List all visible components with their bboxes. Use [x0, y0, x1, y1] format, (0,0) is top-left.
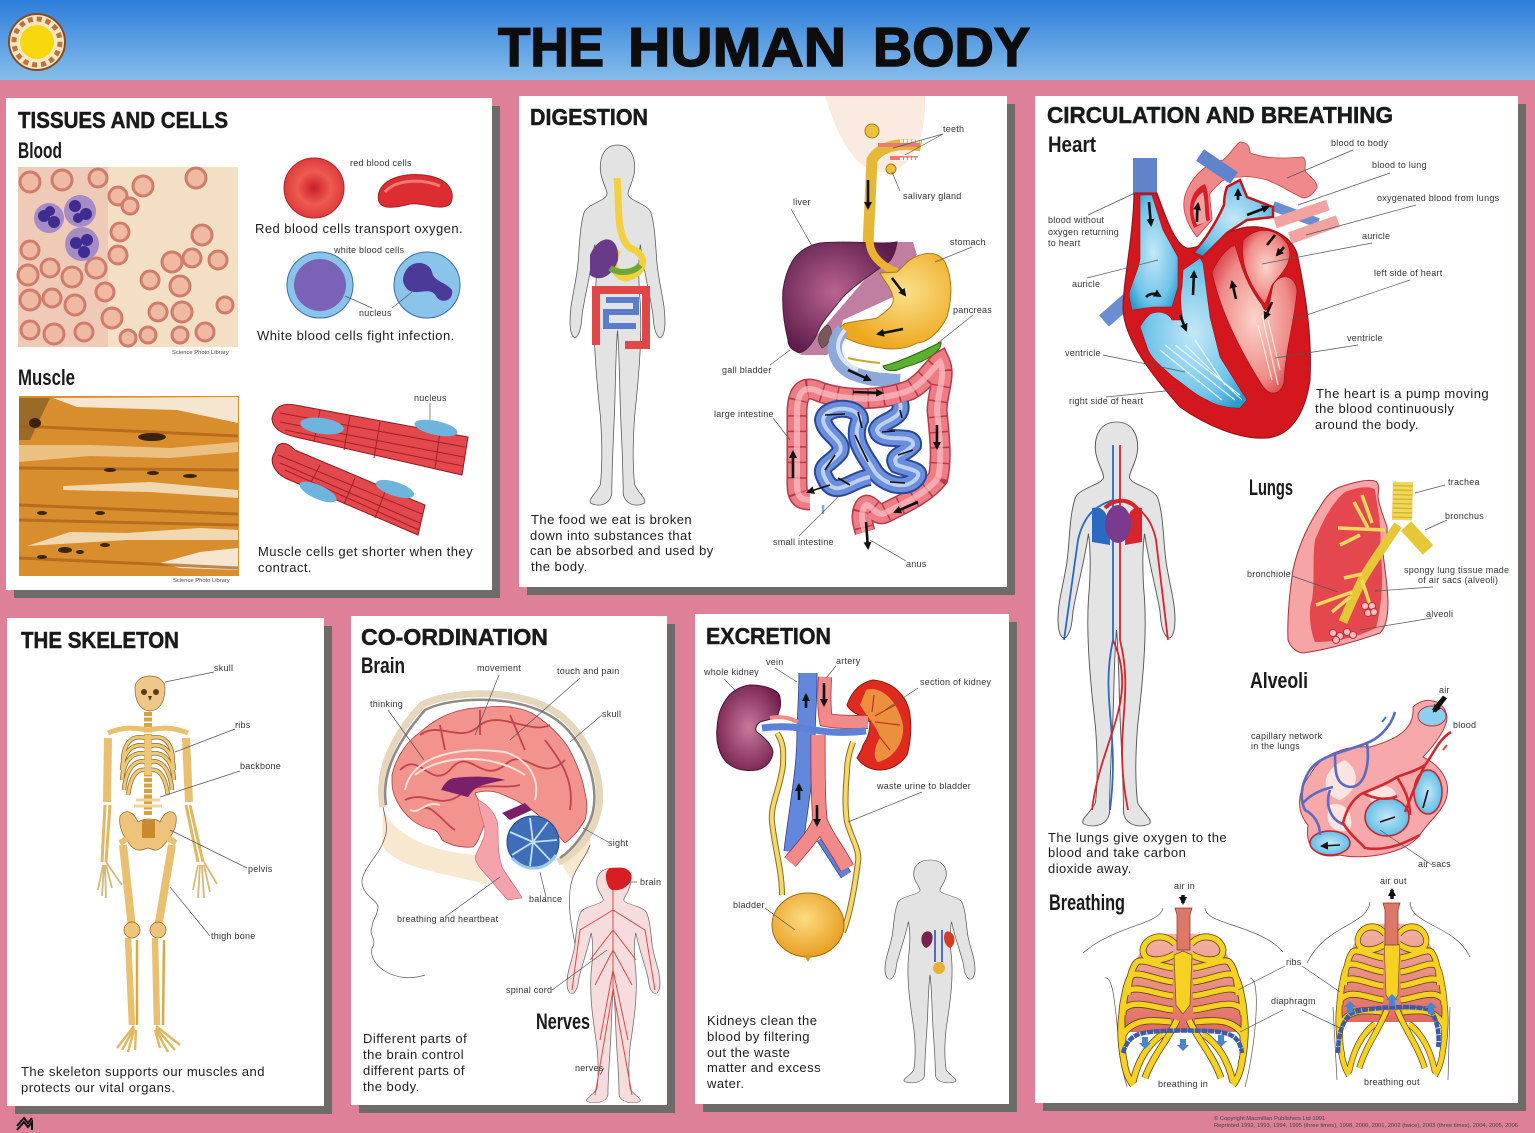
- heart labels: oxygen returning: [1048, 227, 1119, 237]
- brain labels: movement: [477, 663, 521, 673]
- caption: excretion: [706, 1013, 821, 1091]
- icon: red blood cells: [284, 158, 452, 218]
- caption: excretion: out the waste: [707, 1045, 790, 1060]
- copyright: © Copyright Macmillan Publishers Ltd 1991: [1214, 1115, 1325, 1122]
- illustration: lungs: [1288, 480, 1428, 653]
- nerves labels: brain: [640, 877, 661, 887]
- caption: excretion: blood by filtering: [707, 1029, 810, 1044]
- skeleton labels: thigh bone: [211, 931, 256, 941]
- digestion labels: stomach: [950, 237, 986, 247]
- caption: skeleton: The skeleton supports our muscles and: [21, 1064, 265, 1079]
- digestion labels: liver: [793, 197, 811, 207]
- caption: circulation: The lungs give oxygen to the: [1048, 830, 1227, 845]
- caption: digestion: the body.: [531, 559, 588, 574]
- subheading: nerves: Nerves: [536, 1009, 590, 1034]
- heart labels: blood without: [1048, 215, 1105, 225]
- figure: body with kidneys: [885, 860, 975, 1083]
- caption: circulation: blood and take carbon: [1048, 845, 1186, 860]
- photo: blood smear: [18, 167, 238, 347]
- figure: body with circulation: [1058, 422, 1175, 826]
- illustration: large intestine: [793, 362, 942, 548]
- illustration: skeleton: [98, 676, 217, 1052]
- lungs labels: [1247, 477, 1509, 630]
- title: THE: [498, 16, 604, 78]
- lungs labels: of air sacs (alveoli): [1418, 575, 1498, 585]
- caption: heart: The heart is a pump moving: [1316, 386, 1489, 401]
- caption: excretion: Kidneys clean the: [707, 1013, 817, 1028]
- breathing labels: air in: [1174, 881, 1195, 891]
- subheading: breathing: Breathing: [1049, 890, 1125, 915]
- excretion labels: [703, 656, 992, 930]
- figure: nervous system: [567, 868, 660, 1103]
- breathing labels: breathing in: [1158, 1079, 1208, 1089]
- illustration: breathing in: [1083, 895, 1283, 1087]
- heart labels: [1048, 138, 1500, 406]
- excretion labels: vein: [766, 657, 784, 667]
- caption: heart: around the body.: [1315, 417, 1419, 432]
- lungs labels: trachea: [1448, 477, 1480, 487]
- heart labels: auricle: [1072, 279, 1100, 289]
- excretion labels: bladder: [733, 900, 765, 910]
- heading: co-ordination: CO-ORDINATION: [361, 624, 548, 650]
- caption: brain: Different parts of: [363, 1031, 467, 1046]
- caption: heart: the blood continuously: [1315, 401, 1455, 416]
- lungs labels: bronchus: [1445, 511, 1484, 521]
- title: BODY: [873, 16, 1030, 78]
- header banner: [0, 0, 1535, 80]
- lungs labels: spongy lung tissue made: [1404, 565, 1509, 575]
- skeleton labels: backbone: [240, 761, 281, 771]
- caption: skeleton: protects our vital organs.: [21, 1080, 175, 1095]
- brain labels: breathing and heartbeat: [397, 914, 499, 924]
- caption: muscle cells: Muscle cells get shorter when they: [258, 544, 473, 559]
- illustration: small intestine: [808, 403, 918, 492]
- caption: brain: different parts of: [363, 1063, 465, 1078]
- illustration: brain: [362, 694, 600, 978]
- heart labels: oxygenated blood from lungs: [1377, 193, 1500, 203]
- lungs labels: bronchiole: [1247, 569, 1291, 579]
- heading: tissues and cells: TISSUES AND CELLS: [18, 107, 228, 133]
- alveoli labels: in the lungs: [1251, 741, 1300, 751]
- alveoli labels: blood: [1453, 720, 1476, 730]
- heading: excretion: EXCRETION: [706, 623, 831, 649]
- illustration: heart: [1104, 142, 1338, 438]
- photo credit: Science Photo Library: [173, 578, 230, 584]
- title: HUMAN: [628, 16, 846, 78]
- heading: circulation and breathing: CIRCULATION AND BREATHING: [1047, 102, 1393, 128]
- heart labels: ventricle: [1347, 333, 1383, 343]
- caption: muscle cells second line: contract.: [258, 560, 312, 575]
- panel: digestion: [519, 96, 1015, 595]
- caption: red blood cells: Red blood cells transport oxygen.: [255, 221, 463, 236]
- caption: white blood cells: White blood cells fight infection.: [257, 328, 455, 343]
- label: nucleus: nucleus: [359, 308, 392, 318]
- label: red blood cells: red blood cells: [350, 158, 412, 168]
- caption: digestion: The food we eat is broken: [531, 512, 692, 527]
- subheading: alveoli: Alveoli: [1250, 668, 1308, 693]
- photo credit: Science Photo Library: [172, 350, 229, 356]
- photo: muscle tissue: [19, 396, 239, 576]
- caption: circulation: dioxide away.: [1048, 861, 1132, 876]
- subheading: lungs: Lungs: [1249, 475, 1293, 500]
- brain labels: [370, 663, 629, 924]
- heart labels: to heart: [1048, 238, 1081, 248]
- brain labels: sight: [608, 838, 629, 848]
- skeleton labels: [160, 663, 281, 941]
- heart labels: auricle: [1362, 231, 1390, 241]
- heart labels: right side of heart: [1069, 396, 1144, 406]
- heart labels: left side of heart: [1374, 268, 1443, 278]
- illustration: mouth and oesophagus: [825, 96, 925, 245]
- nerves labels: nerves: [575, 1063, 604, 1073]
- heart labels: ventricle: [1065, 348, 1101, 358]
- subheading: heart: Heart: [1048, 132, 1097, 157]
- excretion labels: waste urine to bladder: [876, 781, 971, 791]
- alveoli labels: air: [1439, 685, 1450, 695]
- title: [498, 16, 1030, 78]
- alveoli labels: capillary network: [1251, 731, 1323, 741]
- heart labels: blood to body: [1331, 138, 1389, 148]
- panel: circulation and breathing: [1035, 96, 1526, 1111]
- heading: digestion: DIGESTION: [530, 104, 648, 130]
- nerves labels: spinal cord: [506, 985, 552, 995]
- caption: excretion: matter and excess: [707, 1060, 821, 1075]
- panel: excretion: [695, 614, 1017, 1112]
- illustration: urinary system: [717, 673, 911, 962]
- caption: circulation: [1048, 830, 1227, 876]
- illustration: alveoli: [1300, 697, 1451, 857]
- caption: brain: the body.: [363, 1079, 420, 1094]
- caption: skeleton: [21, 1064, 265, 1095]
- icon: sun logo: [9, 14, 65, 70]
- subheading: brain: Brain: [361, 653, 405, 678]
- digestion labels: gall bladder: [722, 365, 772, 375]
- brain labels: thinking: [370, 699, 403, 709]
- digestion labels: anus: [906, 559, 927, 569]
- breathing labels: air out: [1380, 876, 1407, 886]
- illustration: breathing out: [1307, 890, 1470, 1080]
- figure: body with digestive system: [570, 145, 665, 505]
- icon: muscle cells: [272, 403, 468, 535]
- alveoli labels: air sacs: [1418, 859, 1451, 869]
- subheading: muscle: Muscle: [18, 365, 75, 390]
- publisher logo: [17, 1118, 32, 1130]
- nerves labels: [506, 877, 661, 1075]
- digestion labels: pancreas: [953, 305, 992, 315]
- panel: tissues and cells: [6, 98, 500, 598]
- skeleton labels: skull: [214, 663, 233, 673]
- digestion labels: small intestine: [773, 537, 834, 547]
- illustration: liver and stomach: [783, 230, 951, 381]
- excretion labels: whole kidney: [703, 667, 759, 677]
- caption: brain: the brain control: [363, 1047, 464, 1062]
- icon: white blood cells: [287, 252, 460, 318]
- lungs labels: alveoli: [1426, 609, 1453, 619]
- skeleton labels: pelvis: [248, 864, 273, 874]
- panel: co-ordination: [351, 616, 675, 1113]
- digestion labels: teeth: [943, 124, 964, 134]
- digestion labels: large intestine: [714, 409, 774, 419]
- subheading: blood: Blood: [18, 138, 62, 163]
- digestion labels: salivary gland: [903, 191, 962, 201]
- caption: digestion: can be absorbed and used by: [530, 543, 714, 558]
- caption: digestion: down into substances that: [530, 528, 692, 543]
- panel: the skeleton: [7, 618, 332, 1114]
- copyright: Reprinted 1992, 1993, 1994, 1995 (three times), 1998, 2000, 2001, 2002 (twice), 2003 (three times), 2004, 2005, 2006: [1214, 1123, 1518, 1129]
- caption: excretion: water.: [706, 1076, 744, 1091]
- breathing labels: ribs: [1286, 957, 1302, 967]
- brain labels: skull: [602, 709, 621, 719]
- brain labels: balance: [529, 894, 562, 904]
- heading: the skeleton: THE SKELETON: [21, 627, 179, 653]
- label: white blood cells: white blood cells: [333, 245, 405, 255]
- label: nucleus: nucleus: [414, 393, 447, 403]
- skeleton labels: ribs: [235, 720, 251, 730]
- alveoli labels: [1251, 685, 1476, 869]
- excretion labels: artery: [836, 656, 861, 666]
- brain labels: touch and pain: [557, 666, 620, 676]
- breathing labels: [1158, 876, 1420, 1089]
- breathing labels: breathing out: [1364, 1077, 1420, 1087]
- caption: digestion: [530, 512, 714, 574]
- excretion labels: section of kidney: [920, 677, 992, 687]
- copyright: [1214, 1115, 1518, 1129]
- breathing labels: diaphragm: [1271, 996, 1316, 1006]
- digestion labels: [714, 124, 992, 569]
- caption: heart: [1315, 386, 1489, 432]
- caption: brain: [363, 1031, 467, 1094]
- heart labels: blood to lung: [1372, 160, 1427, 170]
